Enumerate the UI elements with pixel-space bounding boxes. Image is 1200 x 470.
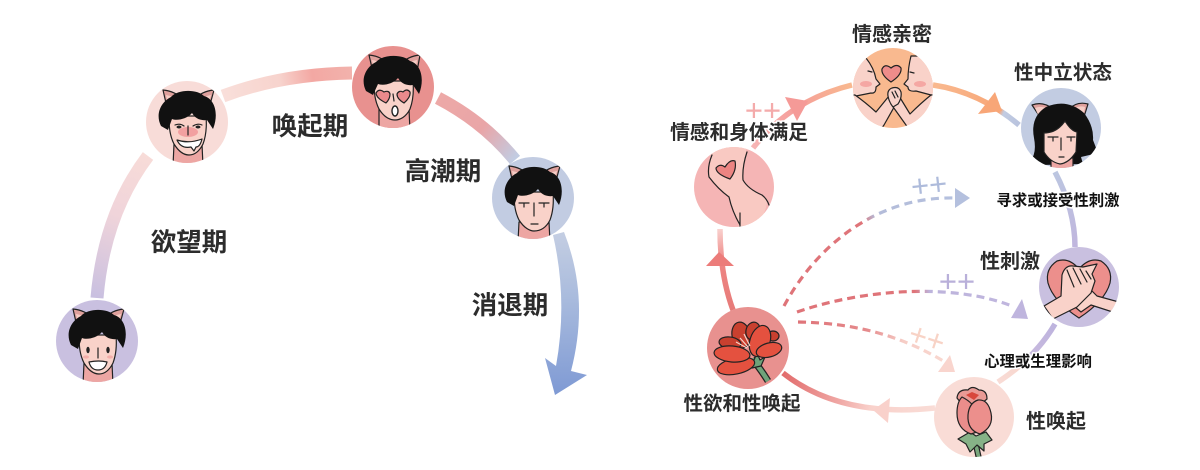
label: sexual arousal: 性唤起 [1026,410,1086,433]
icon: rose, arousal [934,377,1014,461]
label: desire and arousal: 性欲和性唤起 [683,393,801,415]
icon: smiling man, desire [56,300,138,385]
plus marks: seeking stimulation: ++ [909,166,949,204]
arc: desire stage segment [97,156,148,298]
label: desire stage: 欲望期 [151,229,227,257]
label: emotional and physical satisfaction: 情感和身体满足 [670,122,808,144]
icon: red flower, desire and arousal [707,307,789,389]
arrow: satisfaction to intimacy [753,85,852,148]
panel: four-stage arc diagram [56,46,587,395]
arrow: dashed reinforcement to arousal [798,322,955,372]
label: sexual stimulation: 性刺激 [980,250,1040,273]
panel: circular response cycle [670,22,1120,461]
arc: climax stage segment [438,98,515,160]
icon: calm man, resolution [492,157,574,242]
label: neutral state: 性中立状态 [1014,61,1112,84]
label: emotional intimacy: 情感亲密 [852,22,932,46]
arrow: resolution stage [545,232,587,395]
arrow: intimacy to neutral [933,85,1019,125]
arc: stimulation to arousal [998,324,1055,382]
arrow: dashed reinforcement to stimulation [797,291,1028,319]
icon: emotional intimacy [853,48,933,128]
icon: drooling man, desire peak [146,81,228,166]
label: resolution stage: 消退期 [472,292,548,320]
arrow: desire to satisfaction [706,229,734,310]
arrow: dashed reinforcement to seeking stimulation [784,188,970,306]
label: arousal stage: 唤起期 [272,113,348,141]
arc: arousal stage segment [223,73,352,96]
arc: neutral to stimulation [1055,172,1075,247]
arrow: arousal to desire [783,373,935,423]
icon: hands over heart, stimulation [1039,247,1119,327]
label: climax stage: 高潮期 [405,158,481,186]
icon: woman, neutral state [1021,88,1101,172]
icon: heart-eyed man, arousal [352,46,434,131]
plus marks: stimulation: ++ [939,264,975,298]
label: psychological or physiological influence: 心理或生理影响 [984,352,1092,370]
label: seeking or accepting stimulation: 寻求或接受性刺激 [996,190,1120,210]
icon: body with heart, satisfaction [694,145,774,229]
plus marks: satisfaction: ++ [745,92,781,128]
plus marks: arousal: ++ [904,316,950,360]
